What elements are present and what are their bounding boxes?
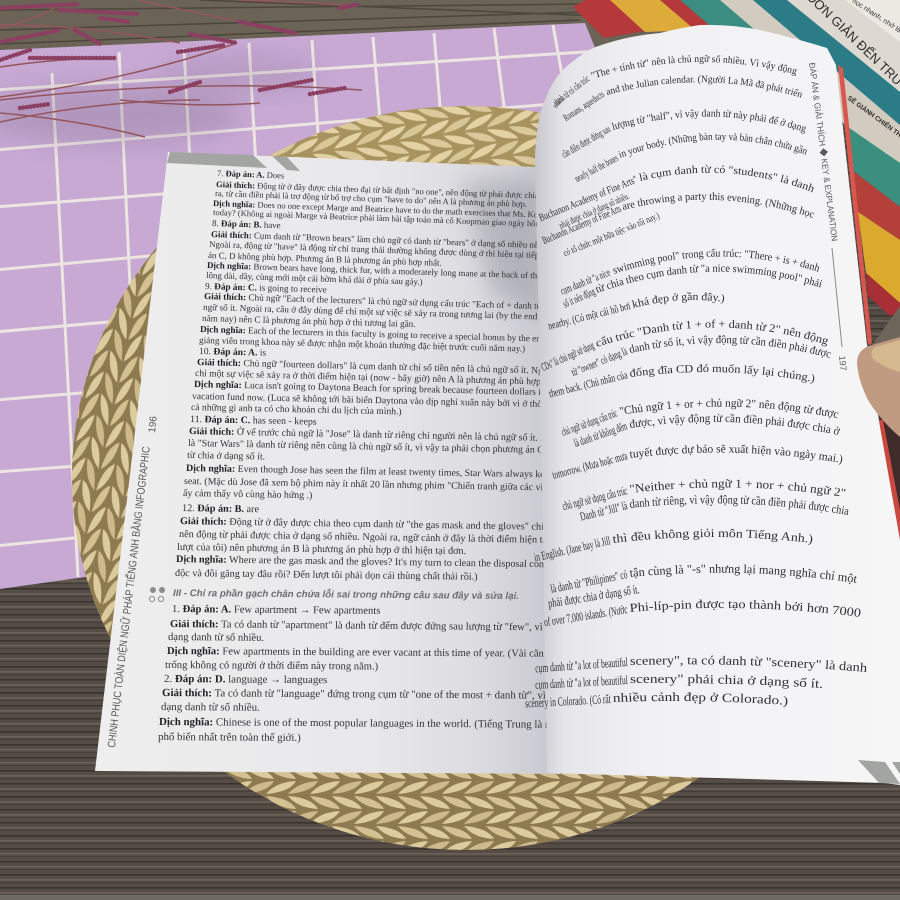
- section III answer 2: 2. Đáp án: D. language → languages: [164, 673, 327, 686]
- answer 11: ấy cảm thấy vô cùng hào hứng .): [183, 488, 312, 501]
- answer 8: Ngoài ra, động từ "have" là động từ chỉ trạng thái thường không được dùng ở thì hiện tại tiếp diễn: [209, 239, 558, 261]
- answer 9: Giải thích: Chủ ngữ "Each of the lecturers" là chủ ngữ sử dụng cấu trúc "Each of + danh từ: [204, 291, 543, 311]
- answer text column: [525, 55, 867, 711]
- answer 14: lượng từ "half", vì vậy danh từ này phải để ở dạng: [611, 109, 806, 134]
- dried pink flower sprigs: [0, 0, 362, 137]
- answer 7: today? (Không ai ngoài Marge và Beatrice phải làm bài tập toán mà cô Koopman giao ngày hôm nay): [213, 207, 560, 229]
- dark table corner beside the page: [875, 337, 900, 540]
- answer 9: giảng viên trong khoa này sẽ được nhận một khoản thưởng đặc biệt trước cuối năm nay.): [199, 335, 525, 354]
- answer 18: tuyết được dự báo sẽ xuất hiện vào ngày mai.): [630, 444, 842, 465]
- answer 9: Dịch nghĩa: Each of the lecturers in this faculty is going to receive a special bonus by the end of: [200, 324, 556, 344]
- answer 8: Dịch nghĩa: Brown bears have long, thick fur, with a moderately long mane at the back of the neck: [207, 260, 561, 281]
- answer 21: scenery in Colorado. (Có rất: [525, 693, 611, 711]
- page number 197: 197: [837, 355, 849, 371]
- answer 21: scenery" phải chia ở dạng số ít.: [630, 674, 822, 689]
- section III answer 2: phổ biến nhất trên toàn thế giới.): [158, 731, 301, 744]
- answer 18: là danh từ không đếm: [572, 419, 630, 451]
- answer 17: [539, 320, 831, 401]
- answer 15: có tổ chức một bữa tiệc vào tối nay.): [561, 209, 661, 259]
- section III answer 2: dạng danh từ số nhiều.: [161, 701, 260, 714]
- section III answer 1: trống không có người ở thời điểm này trong năm.): [165, 660, 379, 672]
- answer 19: thì đều không giỏi môn Tiếng Anh.): [612, 528, 812, 546]
- answer 12: lượt của tôi) nên phương án B là phương án phù hợp ở thì hiện tại đơn.: [177, 542, 466, 557]
- section III answer 1: Dịch nghĩa: Few apartments in the building are ever vacant at this time of year. (Vài căn hộ trong: [167, 646, 583, 660]
- answer 17: CDs" là chủ ngữ sử dụng: [539, 339, 596, 373]
- page number 196: 196: [147, 415, 160, 433]
- answer text column: [149, 168, 588, 744]
- answer 19: chủ ngữ sử dụng cấu trúc: [561, 484, 629, 514]
- answer 8: án C, D không phù hợp. Phương án B là phương án phù hợp nhất.: [208, 250, 442, 268]
- answer 13: nhiều.: [552, 94, 567, 110]
- open book: right page 197: [525, 24, 900, 785]
- answer 9: năm nay) nên C là phương án phù hợp ở thì tương lai gần.: [202, 313, 416, 329]
- section III answer 2: [158, 674, 546, 744]
- answer 19: Danh từ "Jill" là: [579, 500, 629, 524]
- answer 19: in English. (Jane hay là Jill: [533, 535, 612, 565]
- answer 17: đống đĩa CD đó muốn lấy lại chúng.): [630, 364, 814, 384]
- answer 11: seat. (Mặc dù Jose đã xem bộ phim này ít nhất 20 lần nhưng phim "Chiến tranh giữa các vì sao": [184, 476, 563, 494]
- answer 12: độc và đôi găng tay đâu rồi? Đến lượt tôi phải dọn cái thùng chất thải rồi.): [175, 568, 478, 583]
- answer 15: Buchanon Academy of Fine Arts": [537, 173, 639, 225]
- answer 20: of over 7,000 islands. (Nước: [543, 603, 629, 630]
- answer 16: từ chia theo cụm danh từ "a nice swimming pool" phải: [596, 264, 822, 293]
- section III answer 1: [165, 604, 544, 672]
- answer 21: scenery", ta có danh từ "scenery" là danh: [630, 656, 867, 672]
- answer 15: are throwing a party this evening. (Những học: [622, 192, 814, 218]
- answer 18: "Chủ ngữ 1 + or + chủ ngữ 2" nên động từ được: [620, 398, 838, 418]
- answer 20: là danh từ "Philipines" có: [550, 569, 629, 596]
- stack of books, top right: [573, 0, 900, 345]
- answer 21: cụm danh từ "a lot of beautiful: [535, 674, 628, 692]
- answer 8: lông dài, dầy, cùng mới một cái bờm khá dài ở phía sau gáy.): [206, 270, 423, 287]
- answer 9: 9. Đáp án: C. is going to receive: [205, 281, 327, 295]
- answer 21: [525, 656, 867, 711]
- answer 15: [537, 165, 814, 259]
- answer 16: swimming pool" trong cấu trúc: "There + is + danh: [613, 248, 819, 274]
- section III heading: III - Chỉ ra phần gạch chân chứa lỗi sai trong những câu sau đây và sửa lại.: [173, 588, 519, 602]
- answer 8: 8. Đáp án: B. have: [212, 218, 281, 230]
- section III dots: [149, 587, 165, 602]
- answer 9: ngữ số ít. Ngoài ra, câu ở đây dùng để chỉ một sự việc sẽ xảy ra trong tương lai (by the end of this: [203, 302, 563, 322]
- answer 7: [213, 170, 536, 228]
- answer 16: nearby. (Có một cái hồ bơi: [547, 300, 632, 333]
- answer 15: Buchanon Academy of Fine Arts: [540, 202, 623, 246]
- answer 11: [183, 416, 542, 500]
- answer 12: 12. Đáp án: B. are: [182, 503, 260, 515]
- answer 13: [552, 55, 802, 123]
- answer 20: Phi-líp-pin được tạo thành bởi hơn 7000: [630, 600, 860, 617]
- answer 12: [175, 503, 574, 583]
- answer 19: [533, 479, 848, 565]
- answer 8: Giải thích: Cụm danh từ "Brown bears" làm chủ ngữ có danh từ "bears" ở dạng số nhiều nên: [211, 229, 543, 250]
- answer 14: [560, 109, 807, 185]
- answer 12: nên động từ phải được chia ở dạng số nhiều. Ngoài ra, ngữ cảnh ở đây là thời điểm hiện tại (It's: [179, 529, 568, 546]
- lilac tiled mat: [0, 0, 620, 600]
- answer 10: cả những gì anh ta có cho khoản chi du lịch của mình.): [191, 402, 402, 417]
- section III answer 1: 1. Đáp án: A. Few apartment → Few apartments: [172, 604, 380, 617]
- answer 15: phải được chia ở dạng số nhiều.: [557, 190, 631, 231]
- answer 11: Dịch nghĩa: Even though Jose has seen the film at least twenty times, Star Wars always keeps him: [186, 463, 576, 481]
- answer 17: từ "owner" có dạng là: [570, 346, 629, 380]
- answer 13: "The + tính từ" nên là chủ ngữ số nhiều. Vì vậy động: [590, 55, 797, 78]
- answer 11: 11. Đáp án: C. has seen - keeps: [190, 414, 317, 428]
- answer 16: số ít nên động: [561, 285, 597, 310]
- thumb holding the page: [857, 337, 900, 437]
- answer 18: được, vì vậy động từ cần điền phải được chia ở: [630, 414, 840, 435]
- answer 17: cấu trúc "Danh từ 1 + of + danh từ 2" nên động: [596, 320, 828, 346]
- open book: left page 196: [95, 152, 588, 774]
- answer 7: Giải thích: Động từ ở đây được chia theo đại từ bất định "no one", nên động từ phải được chia: [216, 179, 539, 200]
- answer 11: Giải thích: Ở vế trước chủ ngữ là "Jose" là danh từ riêng chỉ người nên là chủ ngữ số ít. Ngoài: [189, 425, 565, 444]
- answer 18: chủ ngữ sử dụng cấu trúc: [560, 406, 619, 438]
- woven straw placemat: [72, 106, 700, 850]
- answer 13: danh từ có cấu trúc: [552, 73, 592, 108]
- answer 17: danh từ số ít, vì vậy động từ cần điền phải được: [630, 335, 831, 358]
- red edge below the thumb: [878, 420, 900, 540]
- answer 18: tomorrow. (Mưa hoặc mưa: [551, 450, 629, 482]
- answer 11: từ chia ở dạng số ít.: [187, 450, 265, 462]
- running title: ĐÁP ÁN & GIẢI THÍCH ◆ KEY & EXPLANATION: [807, 62, 841, 242]
- answer 14: cần điền được đứng sau: [560, 123, 613, 160]
- answer 15: là cụm danh từ có "students" là danh: [638, 165, 814, 192]
- section III answer 1: Giải thích: Ta có danh từ "apartment" là danh từ đếm được đứng sau lượng từ "few", vì vậy cần: [170, 619, 579, 634]
- answer 10: [191, 348, 540, 416]
- answer 20: phải được chia ở dạng số ít.: [547, 584, 641, 611]
- answer 21: nhiều cảnh đẹp ở Colorado.): [613, 692, 788, 708]
- running rule: [832, 248, 842, 347]
- answer 7: ra, từ cần điền phải là trợ động từ bổ trợ cho cụm "have to do" nên A là phương án phù hợp.: [215, 188, 527, 209]
- answer 9: [199, 281, 563, 354]
- answer 13: Romans, aqueducts: [561, 89, 606, 123]
- answer 8: [206, 218, 561, 287]
- answer 13: and the Julian calendar. (Người La Mã đã phát triển: [606, 75, 802, 98]
- answer 12: Dịch nghĩa: Where are the gas mask and the gloves? It's my turn to clean the disposal container: [176, 554, 568, 570]
- answer 7: Dịch nghĩa: Does no one except Marge and Beatrice have to do the math exercises that Ms. Koopman: [213, 198, 562, 220]
- answer 12: Giải thích: Động từ ở đây được chia theo cụm danh từ "the gas mask and the gloves" chỉ hai vật: [180, 516, 574, 533]
- answer 21: cụm danh từ "a lot of beautiful: [535, 656, 628, 676]
- answer 10: 10. Đáp án: A. is: [199, 346, 267, 359]
- answer 20: [543, 564, 860, 630]
- answer 18: [551, 398, 842, 482]
- answer 10: Giải thích: Chủ ngữ "fourteen dollars" là cụm danh từ chỉ số tiền nên là chủ ngữ số ít. Ngoài: [197, 357, 555, 377]
- open book: red page-block edge: [838, 65, 872, 345]
- answer 10: vacation fund now. (Luca sẽ không tới bãi biển Daytona vào dịp nghỉ xuân này bởi vì ở thời điểm: [192, 391, 567, 411]
- corner tabs: [858, 760, 900, 784]
- running title: CHINH PHỤC TOÀN DIỆN NGỮ PHÁP TIẾNG ANH BẰNG INFOGRAPHIC: [105, 446, 153, 748]
- answer 10: Dịch nghĩa: Luca isn't going to Daytona Beach for spring break because fourteen dollars is: [194, 379, 545, 398]
- answer 20: tận cùng là "-s" nhưng lại mang nghĩa chỉ một: [630, 564, 857, 584]
- answer 19: "Neither + chủ ngữ 1 + nor + chủ ngữ 2": [630, 479, 846, 496]
- section III answer 1: dạng danh từ số nhiều.: [168, 632, 264, 644]
- answer 16: cụm danh từ "a nice: [558, 266, 612, 297]
- answer 17: them back. (Chủ nhân của: [548, 369, 629, 401]
- answer 11: là "Star Wars" là danh từ riêng nên cũng là chủ ngữ số ít, vì vậy ta phải chọn phương án C phù: [188, 438, 561, 456]
- answer 14: in your body. (Những bàn tay và bàn chân chứa gần: [618, 132, 807, 158]
- answer 14: nearly half the bones: [573, 152, 620, 185]
- corner tabs: [167, 152, 300, 171]
- answer 16: [547, 248, 822, 333]
- answer 19: danh từ riêng, vì vậy động từ cần điền phải được chia: [630, 495, 848, 515]
- answer 16: khá đẹp ở gần đây.): [631, 292, 724, 308]
- answer 10: chỉ một sự việc sẽ xảy ra ở thời điểm hiện tại (now - bây giờ) nên A là phương án phù hợp ở thì: [195, 368, 561, 388]
- section III answer 2: Giải thích: Ta có danh từ "language" đứng trong cụm từ "one of the most + danh từ", vì vậy cần: [162, 687, 583, 702]
- section III answer 2: Dịch nghĩa: Chinese is one of the most popular languages in the world. (Tiếng Trung là một trong: [159, 716, 588, 731]
- answer 7: 7. Đáp án: A. Does: [217, 168, 284, 180]
